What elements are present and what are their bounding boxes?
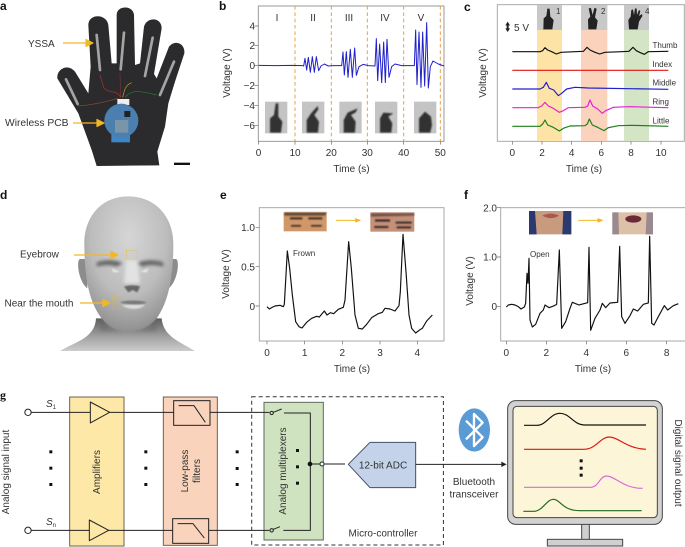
bluetooth label: Bluetooth [453,477,495,488]
channel labels [652,41,678,126]
x axis title f: Time (s) [575,364,611,375]
arrow to eyebrow [74,252,118,258]
x axis title c: Time (s) [566,164,602,175]
x ticks b: 0 [256,148,262,159]
label wireless PCB: Wireless PCB [5,118,69,129]
x ticks e: 4 [415,348,421,359]
x ticks c [510,148,667,159]
ADC, monitor, bluetooth [348,401,662,546]
x ticks b: 10 [289,148,301,159]
x ticks e: 0 [264,348,270,359]
x ticks c: 10 [655,148,667,159]
plot f [497,208,685,344]
x axis title e: Time (s) [334,364,370,375]
glove with sensors [57,7,190,166]
gesture numbers [556,7,650,16]
gesture numbers: 4 [645,7,650,16]
y axis title e: Voltage (V) [221,249,232,299]
y ticks f: 2.0 [483,204,497,214]
x ticks f [504,348,670,359]
multiplexer block [264,402,323,540]
arrow to PCB [73,120,104,126]
x ticks e: 3 [377,348,383,359]
y ticks e [241,223,255,313]
channel labels: Little [652,116,670,126]
y axis title f: Voltage (V) [465,256,476,306]
x ticks c: 6 [599,148,605,159]
plot c [497,5,684,145]
x ticks b [256,148,446,159]
channel labels: Thumb [652,41,678,50]
numerals I to V: IV [380,13,390,24]
x ticks c: 4 [569,148,575,159]
S1: 1 [53,405,57,411]
plot b [254,6,444,145]
y ticks f: 1.0 [483,252,497,264]
x axis title b: Time (s) [333,164,370,175]
label near the mouth: Near the mouth [4,298,73,310]
label e: e [220,188,227,202]
microcontroller label: Micro-controller [349,528,418,540]
output title: Digital signal output [672,419,683,507]
head illustration [60,196,195,351]
y axis title: Voltage (V) [222,48,233,98]
channel labels: Middle [652,78,677,88]
y axis title c: Voltage (V) [478,48,489,98]
x ticks e: 2 [340,348,346,359]
label f: f [464,188,469,202]
numerals I to V: I [276,13,278,24]
y ticks e: 0.5 [241,262,255,274]
x ticks f: 4 [584,348,590,359]
x ticks c: 0 [510,148,516,159]
x ticks b: 30 [362,148,373,159]
ADC label: 12-bit ADC [359,460,407,472]
panel e: frown signal [220,188,444,375]
x ticks f: 2 [544,348,550,359]
x ticks b: 20 [326,148,337,159]
panel a: glove photo [0,0,190,166]
numerals I to V: V [418,13,425,24]
y ticks b: 2 [249,41,255,52]
panel g: signal chain [0,388,683,546]
label c: c [464,0,471,14]
transceiver label: transceiver [450,490,499,500]
x ticks e [264,348,421,359]
gesture numbers: 2 [601,7,606,16]
panel c: five finger channels [464,0,684,175]
plot e [256,208,444,344]
y ticks b: −2 [244,81,255,92]
y ticks e: 0 [249,302,255,313]
y ticks f: 0 [491,302,497,313]
frown label: Frown [293,249,315,258]
y ticks b: −4 [244,101,255,112]
label d: d [0,188,7,202]
x ticks c: 8 [628,148,634,159]
panel b: voltage chart [219,0,446,175]
amplifiers label: Amplifiers [92,450,103,494]
Sn: S [46,517,53,528]
filters label 2: filters [192,459,203,483]
gesture numbers: 1 [556,7,561,16]
ADC block [348,442,416,488]
x ticks f: 0 [504,348,510,359]
y ticks b: −6 [244,121,255,132]
label YSSA: YSSA [28,39,55,50]
y ticks b: 0 [249,61,255,72]
y ticks b: 4 [249,22,255,32]
x ticks f: 8 [664,348,670,359]
monitor [508,401,662,546]
channel labels: Index [652,60,672,69]
numerals I to V [276,13,425,24]
filters block [163,397,217,545]
Sn: n [53,523,56,529]
y ticks f [483,204,497,313]
block diagram left [25,397,345,546]
y ticks b [244,22,255,132]
x ticks e: 1 [302,348,308,359]
arrow to YSSA [63,40,93,46]
arrow to mouth [80,300,110,306]
x ticks b: 50 [435,148,446,159]
bluetooth icon [459,408,490,452]
y ticks e: 1.0 [241,223,255,234]
x ticks c: 2 [539,148,545,159]
label eyebrow: Eyebrow [20,250,60,260]
label g: g [0,388,6,402]
panel f: mouth signal [464,188,685,375]
amplifiers block [70,397,124,546]
input title: Analog signal input [1,430,12,514]
filters label: Low-pass [180,450,191,492]
numerals I to V: III [345,13,353,24]
panel d: head model [0,188,195,351]
microcontroller dashed box [252,397,443,545]
S1: S [46,399,53,410]
scale label: 5 V [514,23,529,34]
x ticks f: 6 [624,348,630,359]
multiplexer label: Analog multiplexers [278,427,289,515]
numerals I to V: II [310,13,316,24]
x ticks b: 40 [398,148,410,159]
channel labels: Ring [652,98,669,106]
open label: Open [530,250,550,259]
